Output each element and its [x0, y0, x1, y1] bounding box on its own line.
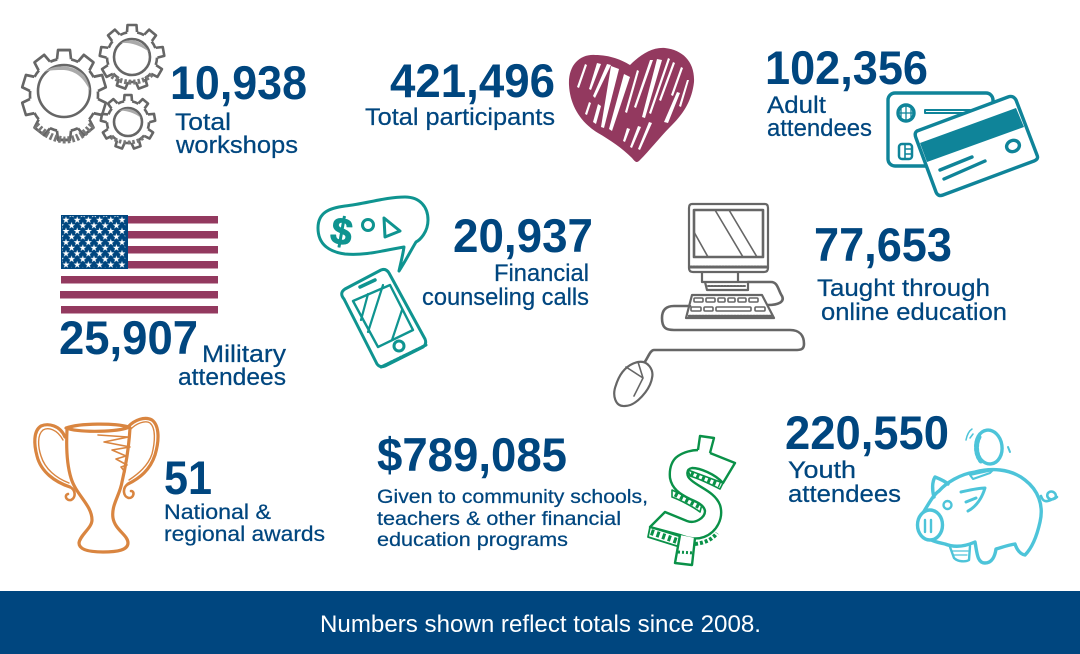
number: 10,938: 10,938: [170, 56, 307, 109]
icon: american flag: [60, 215, 218, 314]
icon: heart: [569, 48, 694, 162]
stat: military attendees: [59, 215, 287, 391]
label: total workshops: Total: [175, 109, 231, 136]
stat: total participants: [365, 48, 694, 162]
label: donations description: Given to community schools,: [377, 486, 648, 508]
stat: community donations: [377, 428, 735, 565]
number: 20,937: 20,937: [453, 209, 593, 262]
number: 77,653: 77,653: [814, 218, 952, 271]
label: total participants: Total participants: [365, 104, 555, 131]
label: national and regional awards: regional awards: [164, 522, 325, 546]
number: 102,356: 102,356: [765, 41, 928, 94]
icon: trophy: [35, 418, 158, 552]
icon: dollar sign: [648, 436, 735, 565]
number: 421,496: 421,496: [390, 54, 555, 107]
icon: desktop computer and mouse: [614, 204, 804, 406]
label: youth attendees: Youth: [788, 457, 856, 484]
label: total workshops: workshops: [175, 132, 298, 159]
stat: financial counseling calls: [318, 197, 593, 367]
label: adult attendees: Adult: [767, 92, 826, 119]
stat: adult attendees: [765, 41, 1038, 196]
label: financial counseling calls: counseling calls: [422, 284, 589, 311]
label: military attendees: attendees: [178, 364, 286, 391]
icon: credit cards: [888, 93, 1038, 196]
number: 25,907: 25,907: [59, 311, 198, 364]
icon: phone and speech bubble: $: [327, 210, 356, 255]
label: donations description: teachers & other financial: [377, 508, 621, 530]
stat: youth attendees: [785, 406, 1057, 563]
label: donations description: education programs: [377, 529, 568, 551]
label: taught through online education: online education: [821, 299, 1007, 326]
number: 220,550: 220,550: [785, 406, 949, 459]
label: adult attendees: attendees: [767, 115, 872, 142]
label: taught through online education: Taught through: [817, 275, 990, 302]
stat: national and regional awards: [35, 418, 325, 552]
icon: gears: [22, 25, 164, 149]
footer banner: [0, 591, 1080, 654]
label: financial counseling calls: Financial: [494, 260, 589, 287]
number: $789,085: $789,085: [377, 428, 567, 481]
label: youth attendees: attendees: [788, 481, 901, 508]
stat: total workshops: [22, 25, 307, 159]
label: military attendees: Military: [202, 341, 287, 368]
icon: phone and speech bubble: [318, 197, 428, 367]
icon: piggy bank with coin: [918, 428, 1057, 563]
footer note: Numbers shown reflect totals since 2008.: [320, 611, 761, 638]
label: national and regional awards: National &: [164, 500, 271, 524]
number: 51: 51: [164, 451, 212, 504]
stat: taught through online education: [614, 204, 1007, 406]
